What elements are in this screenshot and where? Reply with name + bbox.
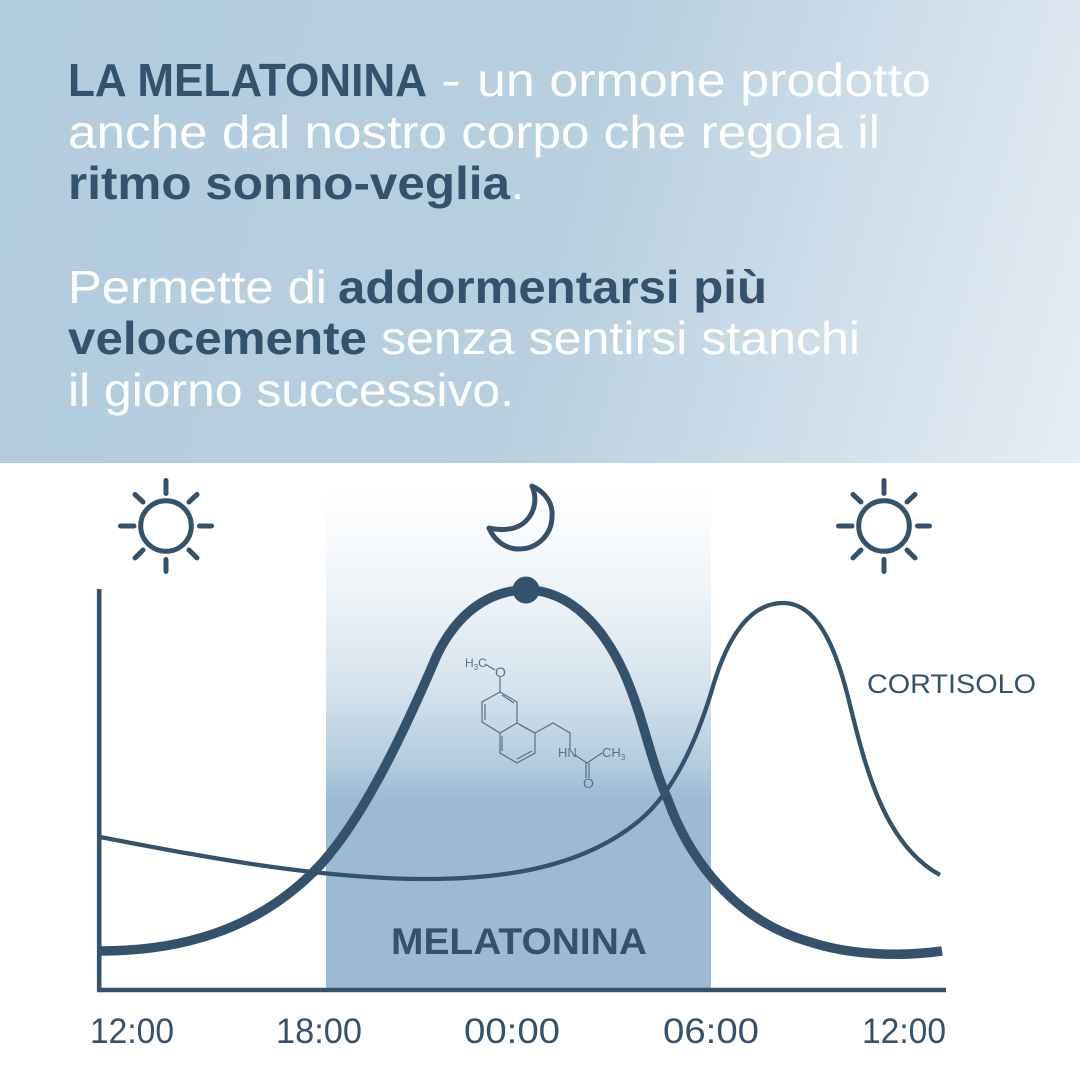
label: cortisol: CORTISOLO [867,669,1036,699]
heading: melatonin definition: . [511,157,524,209]
icon: melatonin molecule: 3 [621,753,626,762]
marker: melatonin peak [512,576,540,604]
icon: melatonin molecule [465,656,626,791]
icon: right sun [838,480,930,572]
text block: melatonin benefit: Permette di [68,261,327,313]
icon: melatonin molecule: C [478,656,487,670]
icon: melatonin molecule: HN [558,745,577,760]
axis labels: time: 12:00 [90,1012,174,1051]
icon: melatonin molecule: O [583,775,594,791]
chart line: cortisol [100,603,940,879]
heading: melatonin definition: LA MELATONINA [68,54,427,106]
icon: moon [489,486,552,549]
heading: melatonin definition: - [441,54,461,106]
heading: melatonin definition [68,54,931,209]
text block: melatonin benefit: velocemente [68,312,367,364]
icon: left sun [120,480,212,572]
icon: melatonin molecule: H [465,656,474,670]
label: melatonin: MELATONINA [391,921,647,962]
heading: melatonin definition: anche dal nostro corpo che regola il [68,106,880,158]
text block: melatonin benefit: il giorno successivo. [68,364,514,416]
axis labels: time: 00:00 [464,1012,560,1051]
panel: header background [0,0,1080,463]
axis labels: time: 18:00 [276,1012,362,1051]
heading: melatonin definition: ritmo sonno-veglia [68,157,510,209]
axis labels: time: 12:00 [862,1012,946,1051]
text block: melatonin benefit [68,261,860,416]
chart axes [99,589,946,990]
text block: melatonin benefit: addormentarsi più [338,261,767,313]
icon: melatonin molecule: CH [602,745,621,760]
panel: night band [326,490,711,990]
icon: melatonin molecule: O [495,664,506,680]
text block: melatonin benefit: senza sentirsi stanchi [381,312,860,364]
heading: melatonin definition: un ormone prodotto [477,54,931,106]
chart line: melatonin [100,590,942,954]
icon: melatonin molecule: 3 [474,663,479,672]
axis labels: time: 06:00 [663,1012,759,1051]
axis labels: time [90,1012,946,1051]
